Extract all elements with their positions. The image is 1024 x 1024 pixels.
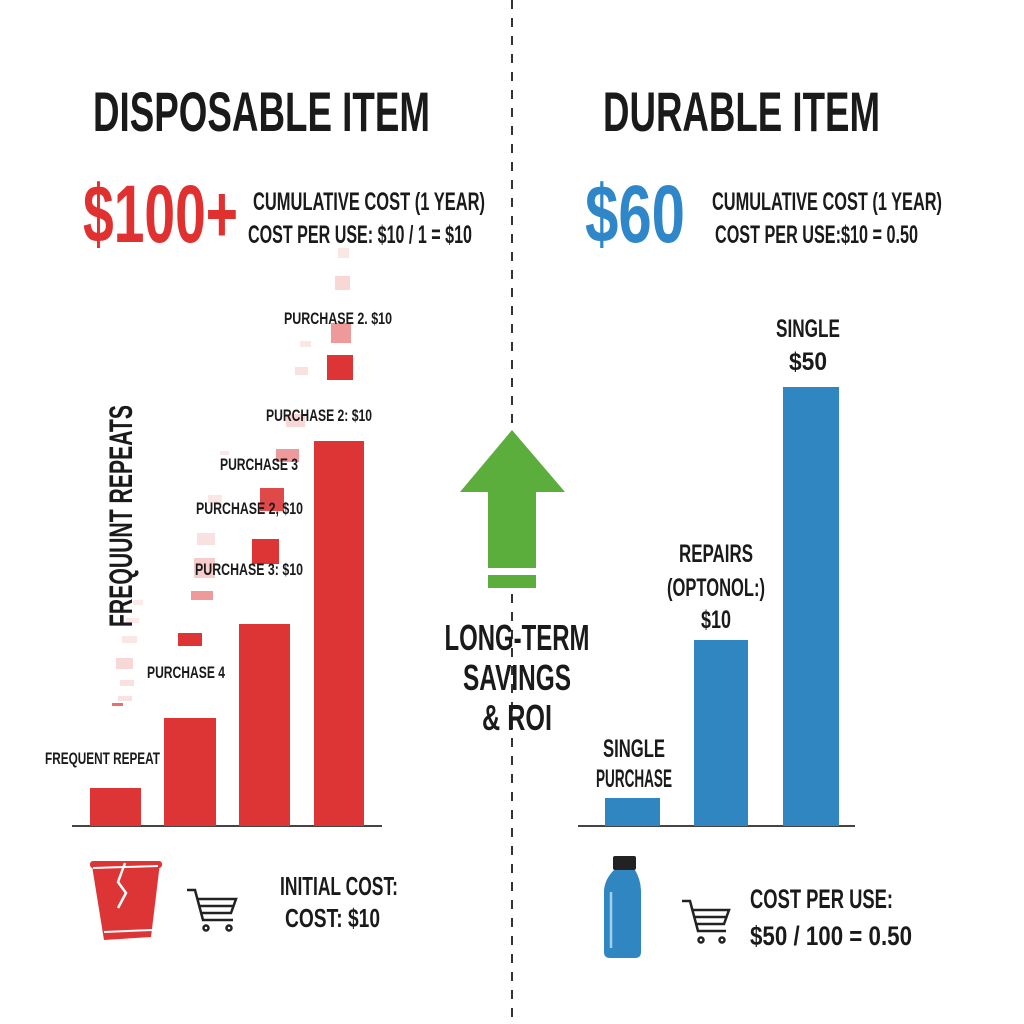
chart: disposable cumulative bars: PURCHASE 4: [147, 663, 225, 682]
icon: broken cup: [90, 861, 162, 940]
icon: blue bottle: [604, 856, 641, 958]
text: long-term savings & roi: & ROI: [482, 697, 552, 738]
chart: disposable cumulative bars: PURCHASE 2, $10: [196, 499, 303, 518]
text: cost per use: [750, 884, 912, 951]
text: long-term savings & roi: [444, 617, 590, 738]
fading squares: [112, 248, 353, 706]
title: disposable item: DISPOSABLE ITEM: [93, 80, 430, 143]
chart: durable bars: $50: [789, 348, 827, 376]
chart: durable bars: $10: [701, 606, 731, 634]
icon: green up arrow: [460, 430, 565, 588]
chart: disposable cumulative bars: FREQUENT REPEAT: [45, 749, 160, 768]
chart: disposable cumulative bars: [45, 248, 392, 826]
chart: durable bars: (OPTONOL:): [667, 574, 765, 602]
text: long-term savings & roi: LONG-TERM: [444, 617, 590, 658]
text: cost per use: $50 / 100 = 0.50: [750, 921, 912, 951]
left cost header: COST PER USE: $10 / 1 = $10: [248, 221, 472, 249]
right cost header: [585, 169, 942, 260]
bar labels: PURCHASE 2. $10: [284, 309, 392, 328]
text: long-term savings & roi: SAVINGS: [463, 657, 571, 698]
left cost header: $100+: [83, 169, 238, 260]
chart: durable bars: SINGLE: [776, 315, 840, 343]
title: durable item: DURABLE ITEM: [603, 80, 880, 143]
vertical label: frequent repeats: FREQUUNT REPEATS: [103, 405, 139, 627]
right cost header: $60: [585, 169, 685, 260]
chart: durable bars: REPAIRS: [679, 540, 753, 568]
left cost header: [83, 169, 485, 260]
chart: durable bars: PURCHASE: [596, 765, 672, 793]
text: initial cost: INITIAL COST:: [280, 871, 398, 901]
icon: cart left: [187, 890, 236, 930]
text: cost per use: COST PER USE:: [750, 884, 893, 914]
right cost header: COST PER USE:$10 = 0.50: [715, 221, 918, 249]
chart: disposable cumulative bars: PURCHASE 2: $10: [266, 406, 372, 425]
left cost header: CUMULATIVE COST (1 YEAR): [253, 188, 485, 216]
chart: durable bars: [578, 315, 855, 826]
chart: disposable cumulative bars: PURCHASE 3: $10: [195, 560, 303, 579]
chart: durable bars: SINGLE: [603, 735, 665, 763]
chart: disposable cumulative bars: PURCHASE 3: [220, 455, 298, 474]
icon: cart right: [682, 901, 729, 942]
text: initial cost: COST: $10: [285, 903, 380, 933]
text: initial cost: [280, 871, 398, 933]
